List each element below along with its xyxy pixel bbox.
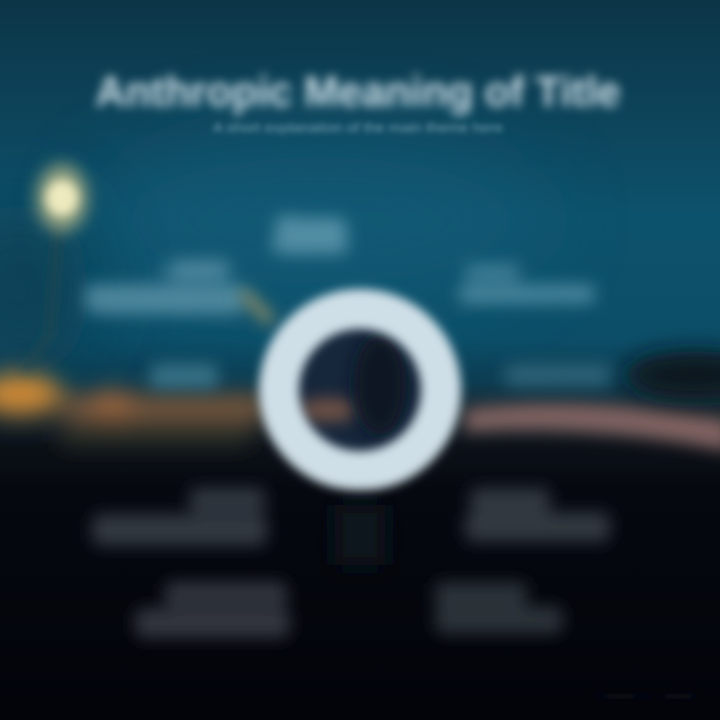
upper label: left: second line: [105, 302, 235, 318]
text block: lower right 2: Label: [435, 580, 525, 605]
upper label: top center: Top: [275, 212, 345, 237]
lower sky label: left: Label: [150, 367, 214, 386]
lower sky label: right: Label text: [505, 365, 605, 384]
upper label: right: Description line: [458, 286, 593, 303]
title: Anthropic Meaning of Title: [96, 68, 620, 116]
upper label: right: Label: [465, 263, 515, 280]
text block: lower left 2: Description: [137, 609, 287, 636]
text block: lower left 1: Label: [188, 488, 262, 510]
center road stem: [335, 505, 385, 565]
upper label: left: Description line: [85, 284, 245, 303]
horizon: pink light trail at right: [465, 404, 720, 452]
text block: lower right 2: Description: [438, 608, 562, 633]
upper label: top center: [270, 212, 350, 256]
upper label: right: [458, 263, 595, 304]
lower sky label: right: [505, 364, 610, 386]
upper label: top center: label: [270, 236, 350, 256]
distant dark hill: [625, 351, 720, 399]
text block: lower right 1: Description: [466, 512, 610, 539]
text block: lower left 1: [90, 488, 267, 546]
text block: lower right 1: [465, 488, 610, 542]
lower sky label: left: [150, 364, 218, 388]
text block: lower right 1: Label: [472, 488, 548, 510]
text block: lower left 1: Description: [90, 516, 266, 543]
street lamp: [24, 164, 88, 370]
upper label: left: Label: [160, 260, 220, 280]
upper label: left: [85, 260, 245, 318]
text block: lower left 2: [135, 580, 290, 638]
text block: lower right 2: [435, 580, 563, 634]
footer mark: Source note: [590, 687, 700, 703]
subtitle: A short explanation of the main theme here: [213, 120, 503, 135]
horizon: orange lights at left: [0, 374, 265, 444]
central ring: [279, 309, 441, 471]
connector arrow to ring: [242, 292, 272, 322]
text block: lower left 2: Label: [165, 580, 285, 605]
